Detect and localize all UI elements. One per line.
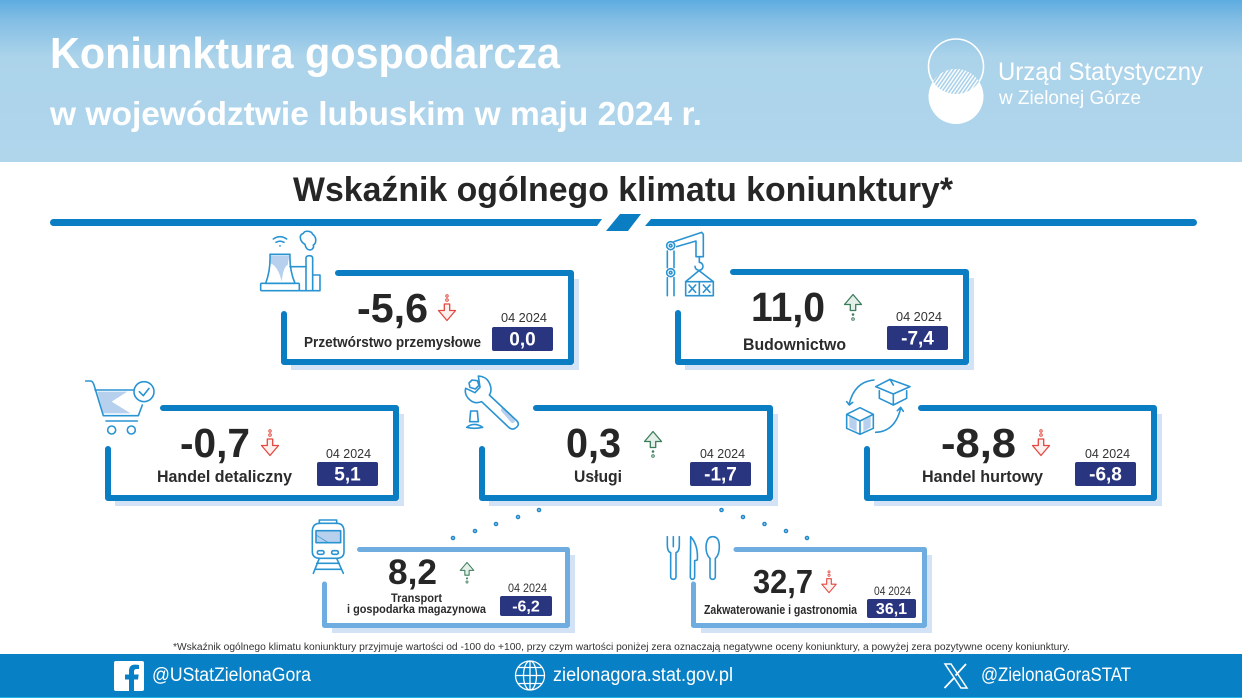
label: Handel detaliczny — [157, 467, 292, 486]
icon: train — [312, 520, 344, 573]
label: i gospodarka magazynowa — [347, 602, 486, 616]
date: 04 2024 — [501, 310, 547, 325]
header band — [0, 0, 1242, 162]
previous value: 0,0 — [509, 330, 536, 350]
arrow up — [460, 562, 474, 583]
panel: Zakwaterowanie i gastronomia — [667, 537, 932, 633]
arrow down — [822, 571, 836, 593]
logo: Urząd Statystyczny — [998, 58, 1203, 86]
value: 0,3 — [566, 420, 621, 466]
date: 04 2024 — [874, 586, 912, 598]
title: Koniunktura gospodarcza — [50, 29, 560, 78]
label: Budownictwo — [743, 335, 846, 354]
arrow down — [1032, 430, 1050, 456]
value: -5,6 — [357, 285, 428, 331]
footer band — [0, 654, 1242, 698]
previous value — [867, 599, 916, 618]
panel: Transport i gospodarka magazynowa — [312, 520, 575, 633]
date: 04 2024 — [508, 583, 548, 595]
date: 04 2024 — [896, 309, 942, 324]
date: 04 2024 — [326, 446, 371, 461]
previous value — [492, 327, 553, 351]
date: 04 2024 — [1085, 446, 1130, 461]
website: zielonagora.stat.gov.pl — [553, 665, 733, 686]
arrow up — [844, 294, 862, 320]
icon: shopping cart — [86, 381, 154, 434]
logo — [928, 39, 1203, 124]
panel: Handel detaliczny — [86, 381, 404, 506]
label: Zakwaterowanie i gastronomia — [704, 603, 858, 617]
previous value: -1,7 — [704, 464, 737, 486]
arrow down — [438, 295, 456, 320]
facebook handle: @UStatZielonaGora — [152, 665, 311, 686]
arrow down — [262, 430, 278, 456]
previous value: 36,1 — [876, 601, 907, 618]
label — [347, 591, 486, 616]
panel: Handel hurtowy — [847, 379, 1162, 506]
arrow up — [644, 432, 662, 457]
panel: Usługi — [465, 376, 778, 506]
label: Handel hurtowy — [922, 467, 1044, 486]
icon: globe — [516, 661, 544, 690]
icon: crane — [667, 232, 713, 296]
X handle: @ZielonaGoraSTAT — [981, 665, 1131, 686]
previous value — [500, 596, 552, 616]
connector dots: left — [451, 508, 541, 540]
icon: X — [944, 664, 967, 688]
icon: boxes — [847, 379, 910, 434]
previous value — [1075, 462, 1136, 486]
value: 8,2 — [388, 553, 437, 592]
previous value: 5,1 — [334, 464, 361, 486]
value: -0,7 — [180, 420, 250, 466]
value: 11,0 — [751, 284, 825, 330]
panel: Przetwórstwo przemysłowe — [261, 231, 579, 370]
icon: cutlery — [667, 537, 719, 579]
connector dots: right — [720, 508, 809, 540]
icon: wrench — [465, 376, 518, 429]
footnote: *Wskaźnik ogólnego klimatu koniunktury przyjmuje wartości od -100 do +100, przy czym wartości poniżej zera oznaczają negatywne oceny koniunktury, a powyżej zera pozytywne oceny koniunktury. — [173, 642, 1070, 653]
label: Usługi — [574, 467, 622, 486]
value: 32,7 — [753, 563, 813, 600]
previous value — [690, 462, 751, 486]
subtitle: w województwie lubuskim w maju 2024 r. — [49, 95, 702, 132]
previous value — [317, 462, 378, 486]
previous value: -6,2 — [512, 598, 540, 616]
previous value: -6,8 — [1089, 464, 1122, 486]
previous value — [887, 326, 948, 350]
main heading: Wskaźnik ogólnego klimatu koniunktury* — [293, 171, 954, 209]
icon: facebook — [114, 661, 144, 691]
value: -8,8 — [941, 420, 1016, 466]
label: Transport — [391, 591, 442, 605]
previous value: -7,4 — [901, 328, 934, 350]
label: Przetwórstwo przemysłowe — [304, 335, 481, 351]
icon: factory — [261, 231, 320, 291]
date: 04 2024 — [700, 446, 745, 461]
panel: Budownictwo — [667, 232, 974, 370]
logo: w Zielonej Górze — [998, 88, 1141, 109]
